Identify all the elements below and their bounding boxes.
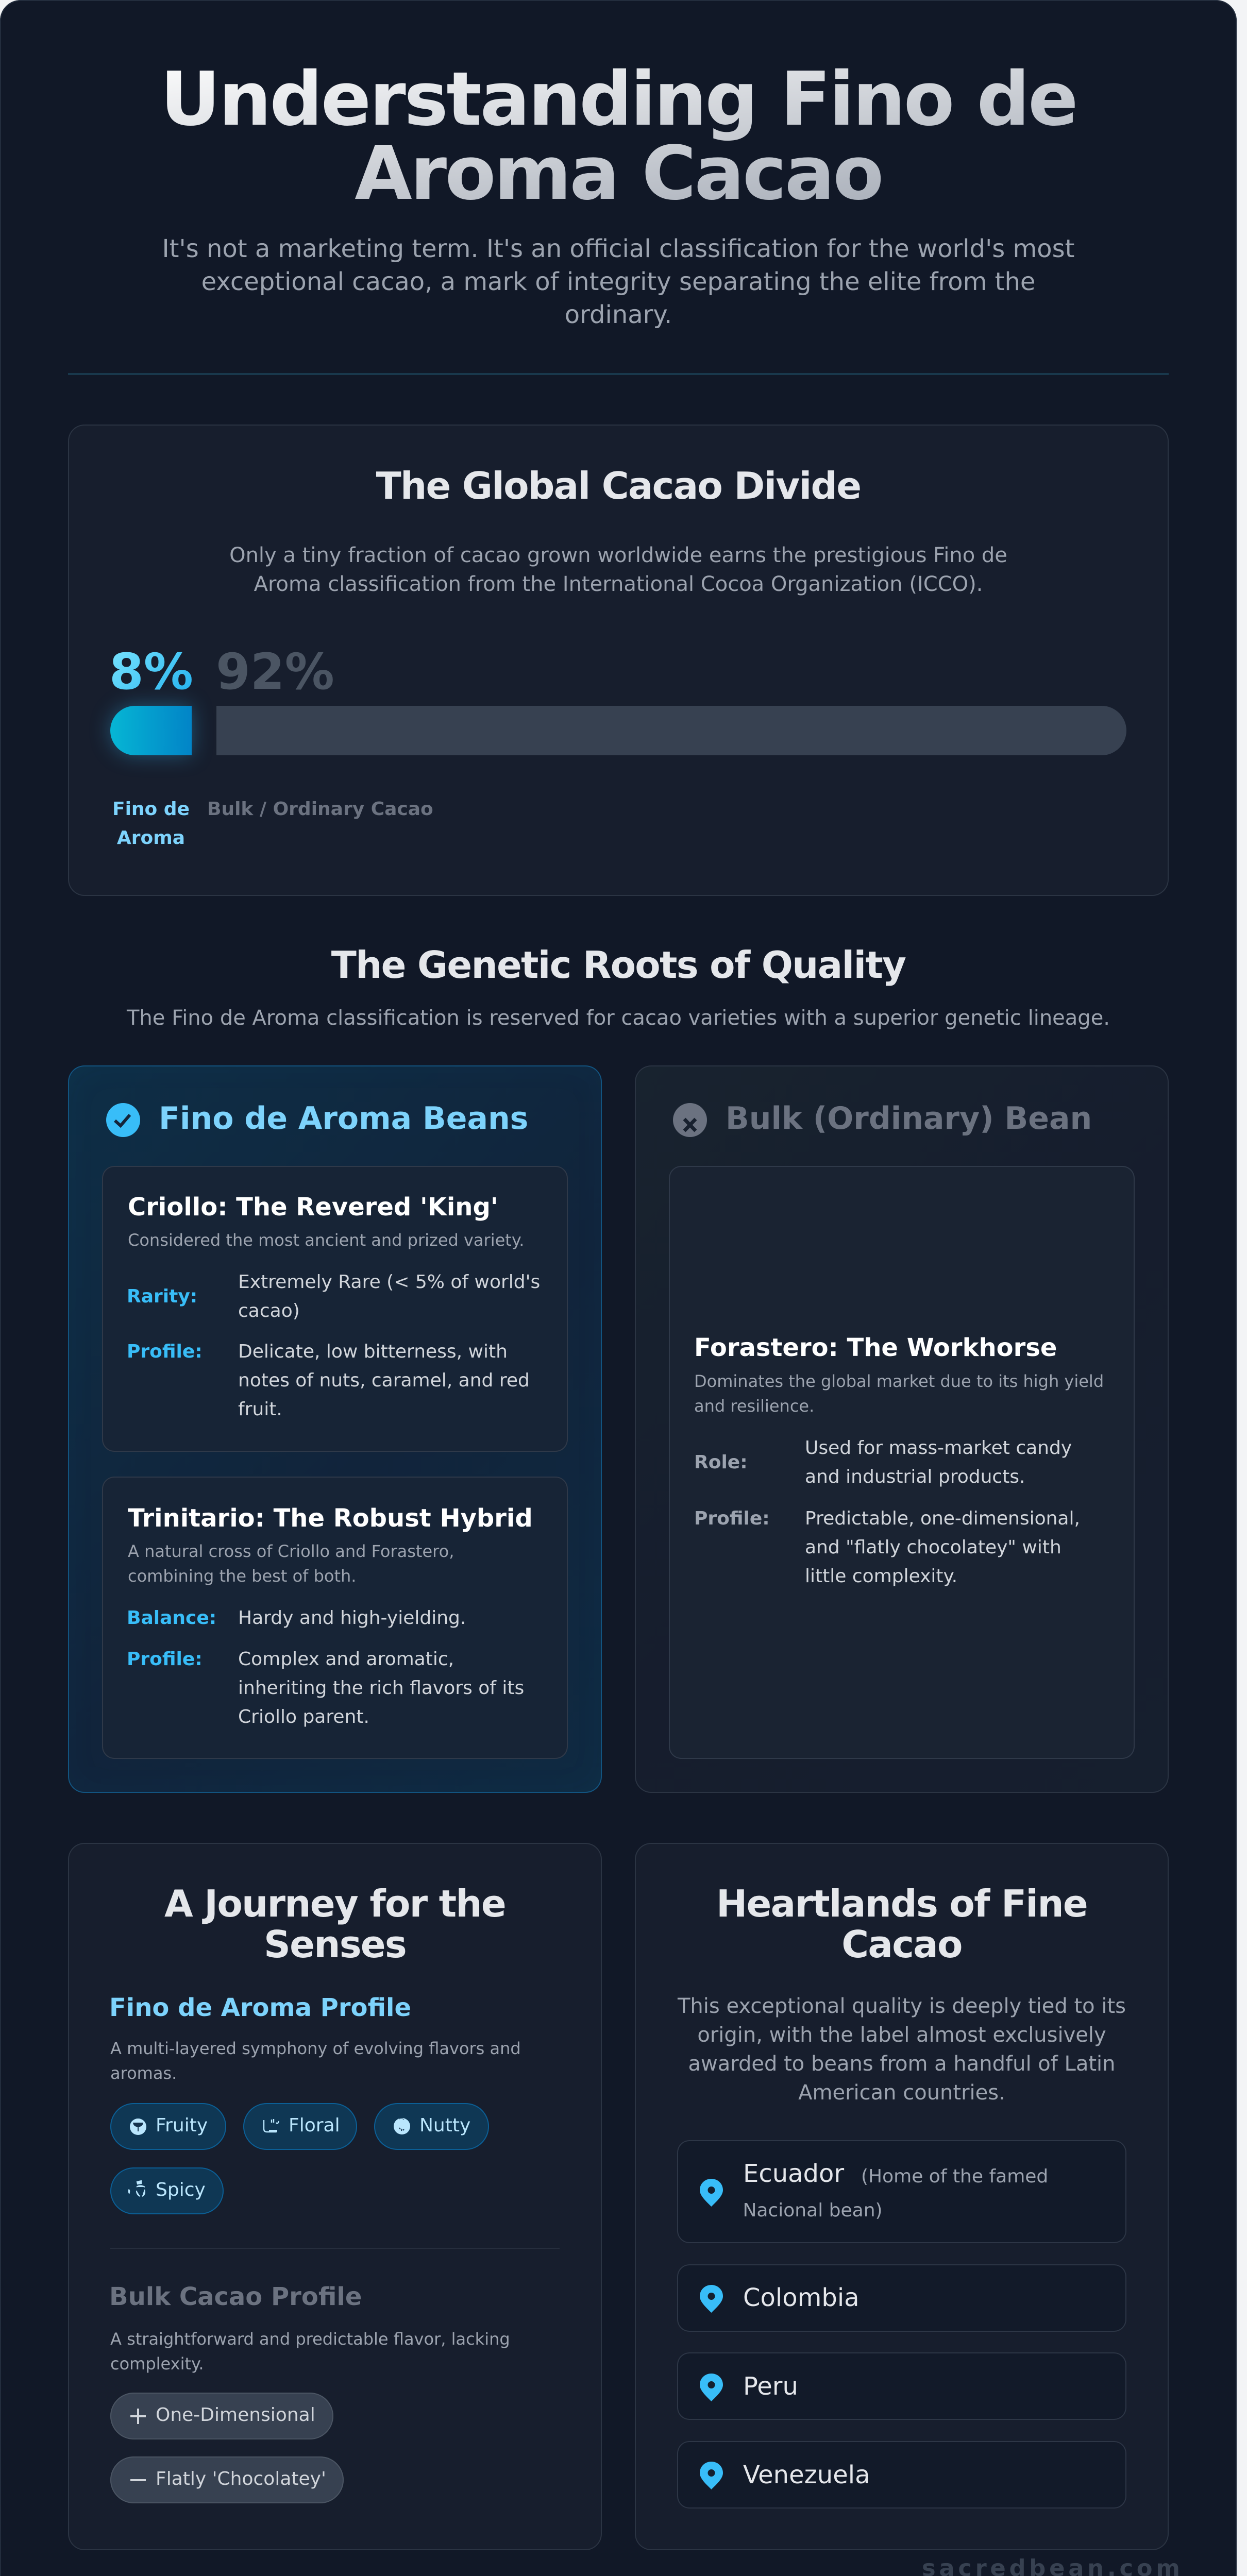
icon: minus	[130, 2472, 146, 2488]
value: rarity: Extremely Rare (< 5% of world's	[238, 1272, 540, 1293]
subtitle: ordinary.	[565, 300, 672, 329]
title: Understanding Fino de	[160, 56, 1076, 142]
value: rarity: cacao)	[238, 1300, 300, 1321]
text: fino profile: A multi-layered symphony of evolving flavors and	[110, 2039, 521, 2058]
text: divide intro: Only a tiny fraction of cacao grown worldwide earns the prestigious Fino de	[229, 544, 1007, 567]
heading: bulk bean: Bulk (Ordinary) Bean	[726, 1100, 1092, 1137]
value: profile: Complex and aromatic,	[238, 1649, 454, 1670]
label: profile: Profile:	[694, 1507, 770, 1529]
name: peru: Peru	[743, 2372, 798, 2401]
location: venezuela	[677, 2441, 1126, 2509]
icon: pin	[700, 2179, 723, 2207]
heading: heartlands: Heartlands of Fine	[716, 1882, 1087, 1925]
note: ecuador line 1: (Home of the famed	[861, 2166, 1048, 2187]
text: trinitario description: combining the best of both.	[128, 1566, 356, 1586]
value: rarity	[238, 1272, 540, 1321]
card: forastero	[669, 1166, 1135, 1759]
note: ecuador line 2: Nacional bean)	[743, 2200, 883, 2221]
title: criollo: Criollo: The Revered 'King'	[128, 1193, 498, 1222]
value: profile: fruit.	[238, 1399, 282, 1420]
text: heartlands intro: origin, with the label almost exclusively	[697, 2023, 1106, 2047]
label: spicy: Spicy	[156, 2179, 206, 2200]
subtitle	[162, 234, 1074, 329]
text: criollo description: Considered the most ancient and prized variety.	[128, 1230, 524, 1250]
text: heartlands intro: This exceptional quality is deeply tied to its	[678, 1994, 1126, 2018]
title: Aroma Cacao	[355, 130, 882, 216]
label: balance: Balance:	[127, 1607, 216, 1628]
text: trinitario description	[128, 1541, 454, 1586]
panel: bulk bean	[635, 1065, 1169, 1793]
chip: nutty	[374, 2103, 489, 2150]
text: genetic roots intro: The Fino de Aroma classification is reserved for cacao varieties with a superior genetic lineage.	[127, 1006, 1110, 1030]
text: divide intro	[229, 544, 1007, 596]
title: trinitario: Trinitario: The Robust Hybrid	[128, 1504, 533, 1533]
location: ecuador	[677, 2140, 1126, 2243]
text: divide intro: Aroma classification from the International Cocoa Organization (ICCO).	[254, 572, 983, 596]
card: trinitario	[102, 1477, 568, 1759]
panel: fino de aroma beans	[68, 1065, 602, 1793]
heading: fino de aroma beans: Fino de Aroma Beans	[159, 1100, 528, 1137]
text: fino profile: aromas.	[110, 2063, 177, 2083]
subtitle: It's not a marketing term. It's an official classification for the world's most	[162, 234, 1074, 263]
stat: 92 percent: 92%	[216, 643, 334, 701]
label: profile: Profile:	[127, 1341, 203, 1362]
text: trinitario description: A natural cross of Criollo and Forastero,	[128, 1541, 454, 1561]
name: colombia: Colombia	[743, 2283, 860, 2312]
name: ecuador: Ecuador	[743, 2159, 844, 2188]
label: profile: Profile:	[127, 1649, 203, 1670]
name: venezuela: Venezuela	[743, 2461, 870, 2489]
icon: pin	[700, 2284, 723, 2312]
subtitle: exceptional cacao, a mark of integrity separating the elite from the	[201, 267, 1035, 296]
bar segment: fino de aroma	[110, 706, 192, 755]
chip: floral	[243, 2103, 357, 2150]
panel: heartlands of fine cacao	[635, 1843, 1169, 2550]
text: bulk profile: A straightforward and predictable flavor, lacking	[110, 2329, 510, 2349]
label: fino de aroma: Aroma	[117, 827, 185, 848]
icon: nutty	[394, 2118, 410, 2134]
text: heartlands intro: American countries.	[798, 2081, 1005, 2105]
card: criollo	[102, 1166, 568, 1452]
text: forastero description: and resilience.	[694, 1396, 814, 1416]
heading: heartlands	[635, 1884, 1169, 1965]
heading: journey: A Journey for the	[164, 1882, 505, 1925]
icon: floral	[263, 2119, 279, 2133]
chip: flatly chocolatey	[110, 2456, 344, 2503]
heading: journey: Senses	[264, 1923, 406, 1966]
value: role: Used for mass-market candy	[805, 1437, 1072, 1458]
label: one-dimensional: One-Dimensional	[156, 2404, 315, 2426]
title	[68, 62, 1169, 210]
icon: pin	[700, 2373, 723, 2401]
value: profile: and "flatly chocolatey" with	[805, 1536, 1061, 1558]
text: bulk profile: complexity.	[110, 2354, 204, 2374]
text: heartlands intro	[635, 1992, 1169, 2107]
chip: fruity	[110, 2103, 226, 2150]
subheading: bulk profile: Bulk Cacao Profile	[109, 2282, 362, 2311]
icon: plus	[130, 2408, 146, 2425]
chip: one-dimensional	[110, 2393, 333, 2439]
icon: spicy	[128, 2180, 146, 2198]
value: profile	[805, 1507, 1080, 1587]
heading: heartlands: Cacao	[841, 1923, 962, 1966]
title: forastero: Forastero: The Workhorse	[694, 1333, 1057, 1362]
location: peru	[677, 2352, 1126, 2420]
value: profile: little complexity.	[805, 1565, 957, 1587]
value: role	[805, 1437, 1072, 1487]
value: profile: Delicate, low bitterness, with	[238, 1341, 508, 1362]
icon: fruity	[130, 2119, 146, 2135]
label: fino de aroma: Fino de	[112, 799, 190, 819]
value: profile: Criollo parent.	[238, 1706, 369, 1727]
heading: global cacao divide: The Global Cacao Divide	[376, 464, 861, 507]
value: balance: Hardy and high-yielding.	[238, 1607, 466, 1628]
text: heartlands intro: awarded to beans from a handful of Latin	[688, 2052, 1115, 2076]
text: fino profile	[110, 2039, 521, 2083]
heading: journey	[164, 1882, 505, 1966]
panel: journey for the senses	[68, 1843, 602, 2550]
icon: cross	[673, 1103, 707, 1137]
label: fruity: Fruity	[156, 2115, 208, 2136]
label: nutty: Nutty	[419, 2115, 470, 2136]
heading: genetic roots: The Genetic Roots of Quality	[331, 943, 905, 987]
value: profile: Predictable, one-dimensional,	[805, 1507, 1080, 1529]
value: profile: inheriting the rich flavors of its	[238, 1677, 524, 1699]
chip: spicy	[110, 2167, 224, 2214]
value: profile	[238, 1341, 530, 1420]
text: bulk profile	[110, 2327, 510, 2376]
icon: pin	[700, 2462, 723, 2489]
text: forastero description: Dominates the global market due to its high yield	[694, 1371, 1104, 1391]
label: fino de aroma	[112, 799, 190, 848]
label: bulk: Bulk / Ordinary Cacao	[207, 799, 433, 819]
label: floral: Floral	[289, 2115, 340, 2136]
icon: check	[106, 1103, 140, 1137]
value: profile: notes of nuts, caramel, and red	[238, 1370, 530, 1391]
text: forastero description	[694, 1371, 1104, 1416]
label: rarity: Rarity:	[127, 1286, 197, 1307]
label: flatly chocolatey: Flatly 'Chocolatey'	[156, 2468, 326, 2489]
label: role: Role:	[694, 1452, 748, 1473]
stat: 8 percent: 8%	[109, 643, 193, 701]
panel: the global cacao divide	[68, 425, 1169, 896]
bar segment: bulk	[216, 706, 1126, 755]
subheading: fino profile: Fino de Aroma Profile	[109, 1993, 411, 2022]
value: profile	[238, 1649, 524, 1727]
location: colombia	[677, 2264, 1126, 2332]
value: role: and industrial products.	[805, 1466, 1025, 1487]
